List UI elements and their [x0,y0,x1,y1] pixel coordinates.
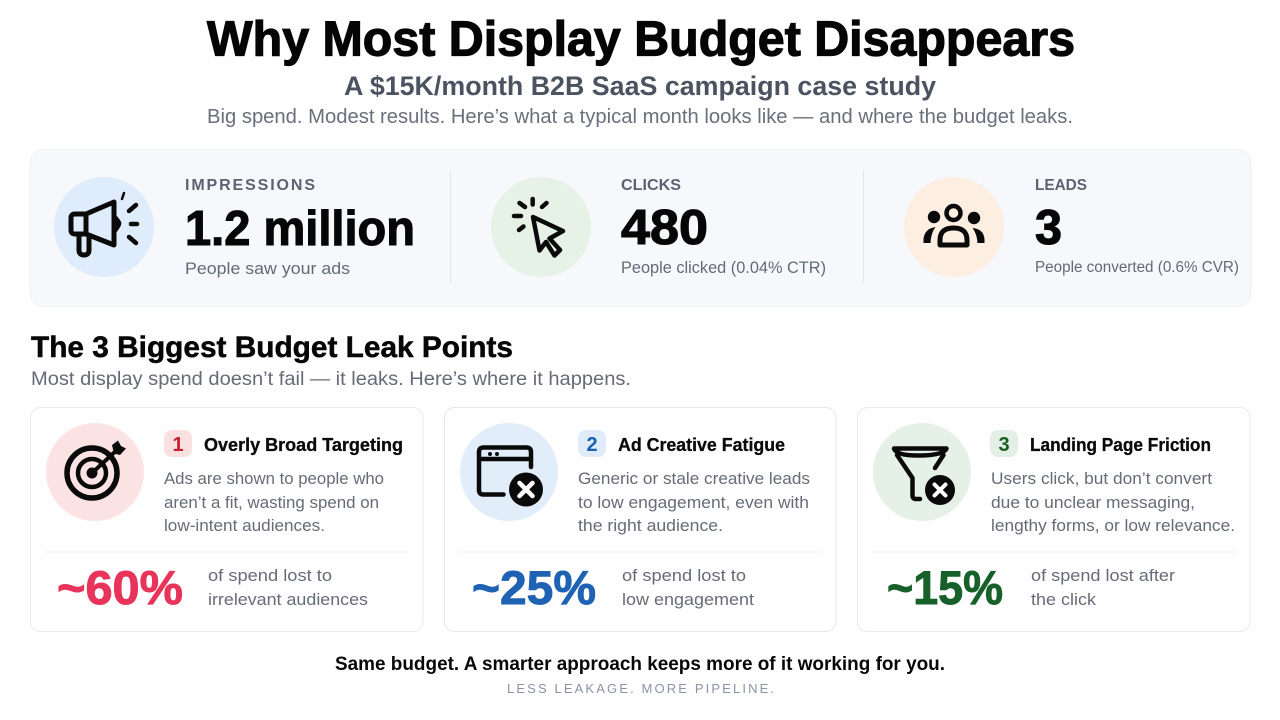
caption: People converted (0.6% CVR) [1035,259,1239,276]
value: 1.2 million [185,202,415,256]
badge: 2 [578,430,606,457]
badge: 1: 1 [172,434,184,456]
description: aren’t a fit, wasting spend on [164,493,379,512]
icon: funnel with x [873,423,971,521]
value: 480 [621,201,708,255]
description: Users click, but don’t convert [991,469,1212,488]
description: due to unclear messaging, [991,493,1195,512]
label: CLICKS [621,177,681,194]
stat caption: irrelevant audiences [208,590,368,609]
stat caption: the click [1031,590,1097,609]
stat: 25%: ~25% [472,561,596,614]
metric: leads [904,177,1239,277]
stat caption [1031,566,1175,609]
badge: 2: 2 [586,434,598,456]
badge: 1 [164,430,192,457]
section heading: The 3 Biggest Budget Leak Points [31,331,513,364]
icon: people [904,177,1004,277]
metric: clicks [491,177,826,277]
icon: target [46,423,144,521]
stat: 15%: ~15% [887,561,1003,614]
card title: Overly Broad Targeting [204,435,403,455]
stat caption [622,566,754,609]
card title: Ad Creative Fatigue [618,435,785,455]
subtitle: A $15K/month B2B SaaS campaign case study [344,71,936,101]
card title: Landing Page Friction [1030,435,1211,455]
label: LEADS [1035,177,1087,194]
title: Why Most Display Budget Disappears [207,12,1075,66]
icon: cursor click [491,177,591,277]
description [578,469,810,535]
stat: 60%: ~60% [57,561,183,614]
panel: leak point 2 [444,408,836,632]
label: IMPRESSIONS [185,177,315,194]
icon: megaphone [54,177,154,277]
closing statement: Same budget. A smarter approach keeps more of it working for you. [335,654,945,675]
panel: leak point 1 [30,408,423,632]
value: 3 [1035,201,1062,255]
stat caption: of spend lost after [1031,566,1175,585]
icon: browser with x [460,423,558,521]
stat caption: low engagement [622,590,754,609]
tagline: Big spend. Modest results. Here’s what a typical month looks like — and where the budget leaks. [207,106,1073,128]
panel: funnel metrics [30,150,1251,306]
badge: 3: 3 [998,434,1010,456]
stat caption [208,566,368,609]
panel: leak point 3 [858,408,1250,632]
closing tagline: LESS LEAKAGE. MORE PIPELINE. [507,681,774,696]
caption: People clicked (0.04% CTR) [621,258,826,277]
description [164,469,384,535]
section subheading: Most display spend doesn’t fail — it leaks. Here’s where it happens. [31,369,631,390]
badge: 3 [990,430,1018,457]
description: to low engagement, even with [578,493,809,512]
description [991,469,1235,535]
caption: People saw your ads [185,259,350,278]
stat caption: of spend lost to [208,566,332,585]
description: Ads are shown to people who [164,469,384,488]
description: lengthy forms, or low relevance. [991,516,1235,535]
description: Generic or stale creative leads [578,469,810,488]
description: the right audience. [578,516,723,535]
description: low-intent audiences. [164,516,325,535]
metric: impressions [54,177,415,278]
stat caption: of spend lost to [622,566,746,585]
